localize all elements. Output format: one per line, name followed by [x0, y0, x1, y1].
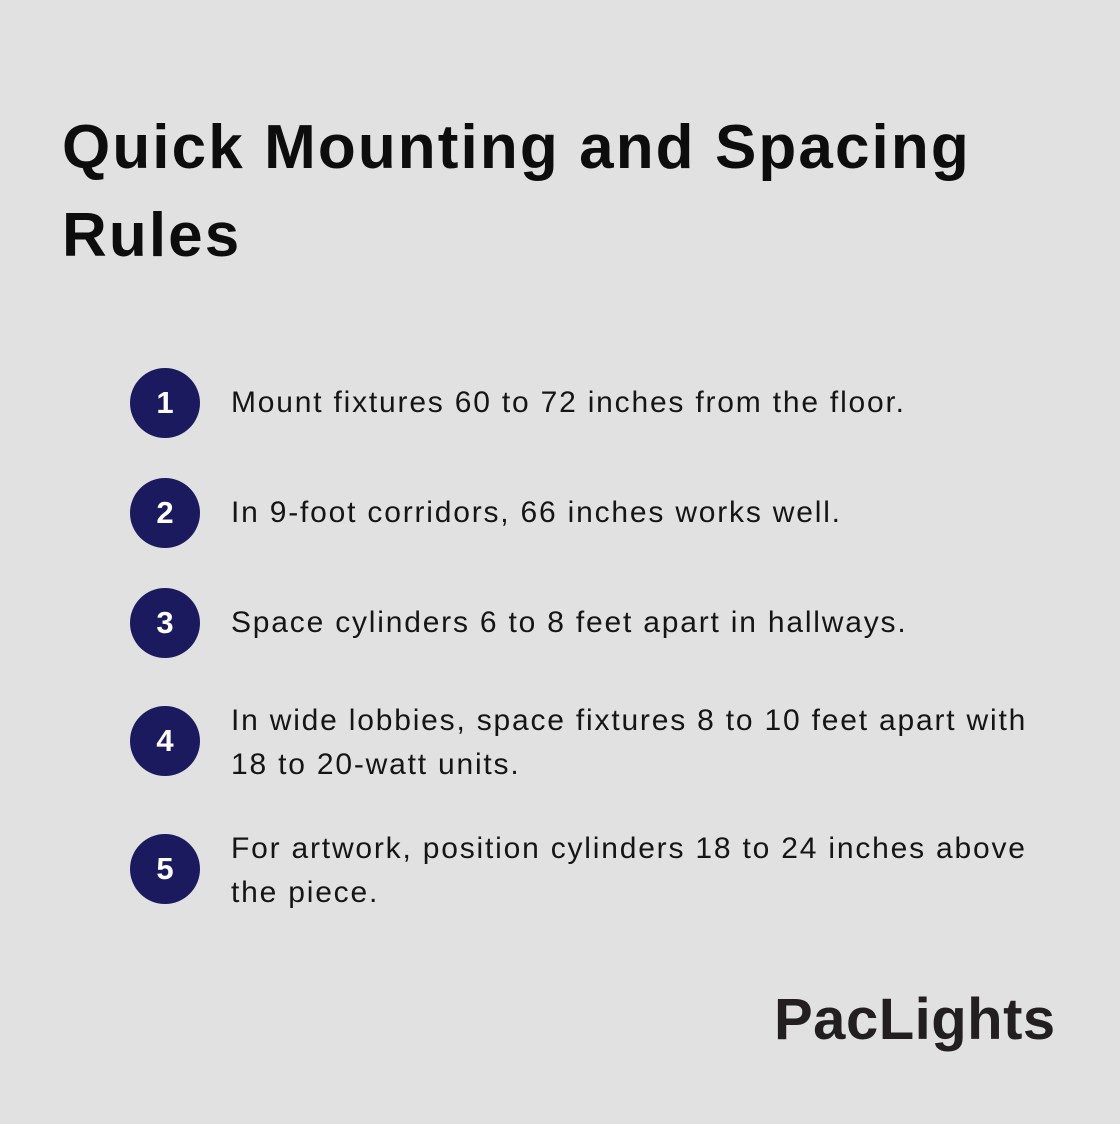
title: Quick Mounting and Spacing — [62, 113, 971, 182]
badge 5 — [130, 834, 200, 904]
logo: PacLights — [774, 987, 1056, 1052]
badge 1 — [130, 368, 200, 438]
title — [62, 113, 971, 270]
badge 2 — [130, 478, 200, 548]
text 5 — [231, 832, 1027, 909]
item 5 — [130, 832, 1027, 909]
item 1 — [130, 368, 906, 438]
badge 5: 5 — [156, 851, 174, 886]
text 4 — [231, 704, 1027, 781]
item 4 — [130, 704, 1027, 781]
title: Rules — [62, 201, 241, 270]
text 1: Mount fixtures 60 to 72 inches from the floor. — [231, 386, 906, 419]
badge 3 — [130, 588, 200, 658]
item 2 — [130, 478, 842, 548]
item 3 — [130, 588, 907, 658]
badge 2: 2 — [156, 495, 174, 530]
badge 4 — [130, 706, 200, 776]
text 2: In 9-foot corridors, 66 inches works well. — [231, 496, 842, 529]
text 4: In wide lobbies, space fixtures 8 to 10 feet apart with — [231, 704, 1027, 737]
badge 1: 1 — [156, 385, 174, 420]
text 5: the piece. — [231, 876, 379, 909]
text 4: 18 to 20-watt units. — [231, 748, 520, 781]
badge 3: 3 — [156, 605, 174, 640]
badge 4: 4 — [156, 723, 174, 758]
text 3: Space cylinders 6 to 8 feet apart in hallways. — [231, 606, 907, 639]
text 5: For artwork, position cylinders 18 to 24 inches above — [231, 832, 1027, 865]
